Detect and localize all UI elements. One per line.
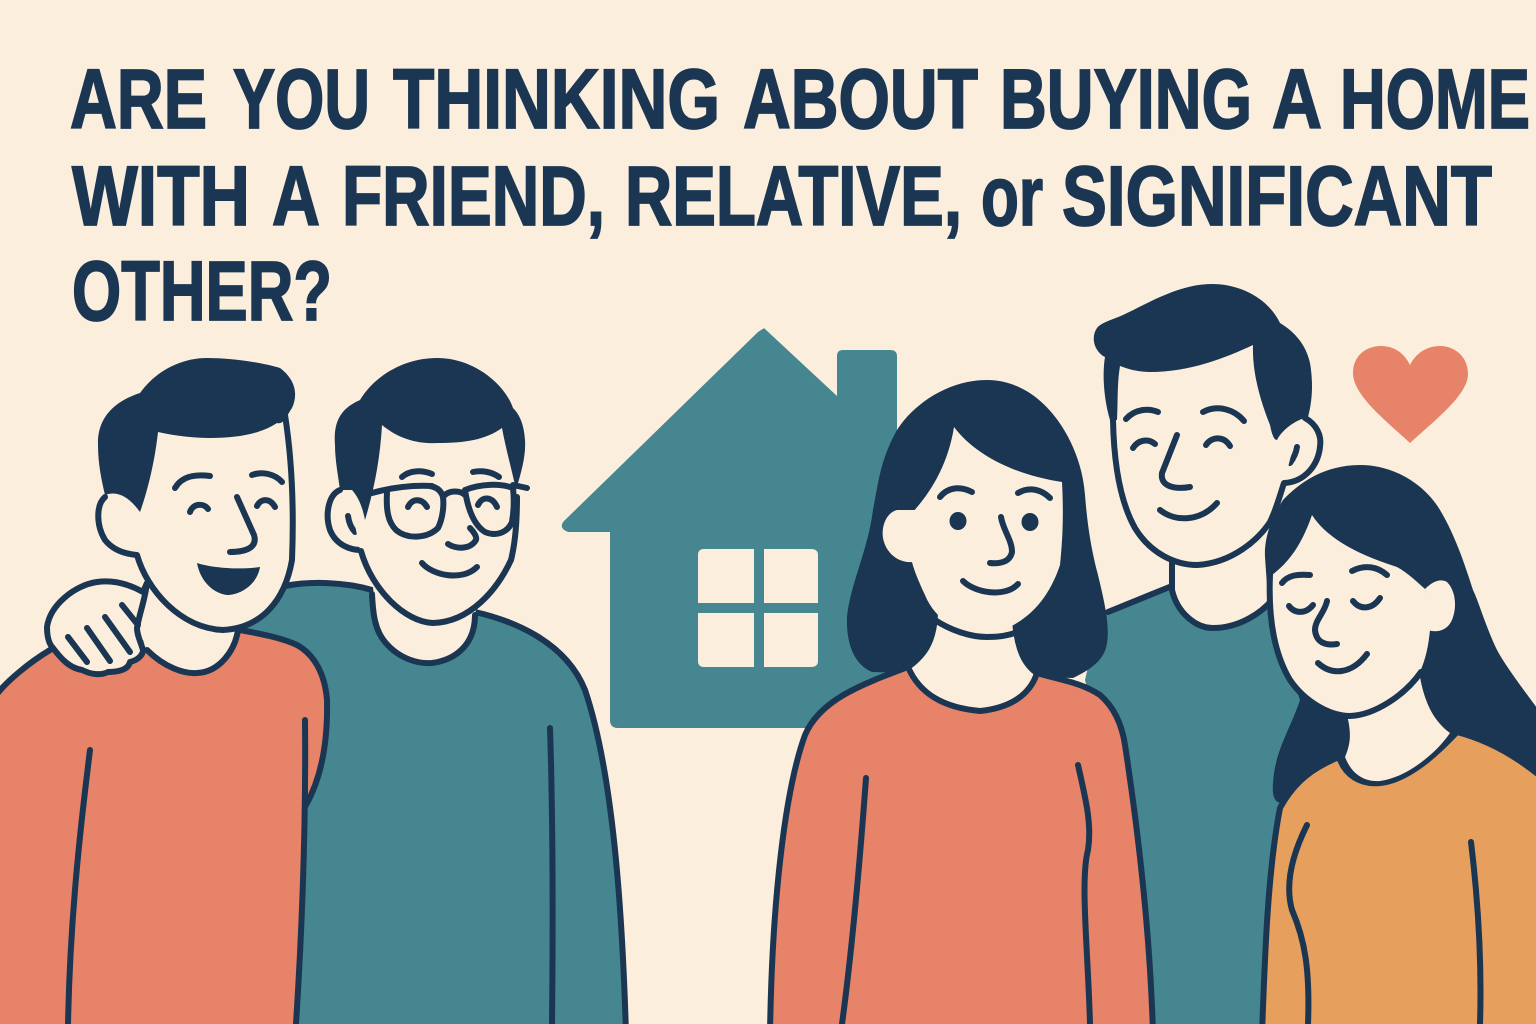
ear: [883, 510, 920, 562]
teal sweater: [240, 583, 626, 1024]
neck: [373, 585, 476, 663]
title: ABOUT: [743, 52, 978, 146]
hand on shoulder: [47, 581, 147, 674]
figure: man with glasses in teal sweater: [240, 358, 626, 1024]
brows: [402, 471, 432, 477]
neck: [1345, 677, 1450, 781]
mouth: [197, 563, 260, 595]
ear: [1425, 580, 1455, 631]
brows: [1126, 410, 1158, 419]
teal sweater: [1085, 587, 1360, 1024]
hair: [1094, 284, 1312, 440]
mouth: [422, 563, 477, 576]
nose: [448, 528, 476, 548]
figure: woman in orange sweater: [1262, 465, 1536, 1024]
title: FRIEND,: [342, 149, 605, 243]
face: [908, 427, 1063, 635]
figure: tall man in teal sweater: [1085, 284, 1360, 1024]
title: YOU: [233, 52, 370, 146]
nose: [1315, 601, 1337, 644]
brows: [1282, 575, 1310, 583]
nose: [990, 517, 1012, 563]
face: [135, 418, 292, 630]
mouth: [1160, 503, 1217, 518]
title: ARE: [70, 52, 207, 146]
hair: [847, 380, 1108, 678]
hair: [1265, 465, 1536, 803]
icon: heart: [1353, 346, 1468, 443]
title: RELATIVE,: [625, 149, 962, 243]
ear: [98, 497, 155, 555]
face: [1113, 340, 1295, 565]
ear: [328, 490, 375, 551]
face: [1270, 515, 1430, 715]
coral sweater: [0, 630, 327, 1024]
sweater: [770, 667, 1153, 1024]
title: A: [272, 149, 320, 243]
neck: [140, 585, 238, 673]
title: BUYING: [1000, 52, 1252, 146]
brows: [175, 475, 210, 488]
neck: [1172, 540, 1280, 628]
eyes: [408, 500, 427, 507]
title: A: [1272, 52, 1322, 146]
icon: window: [698, 549, 818, 667]
nose: [230, 497, 255, 552]
mouth: [963, 581, 1018, 592]
ear: [1270, 418, 1320, 483]
sweater: [1262, 732, 1536, 1024]
eyes: [1133, 441, 1155, 448]
neck and collar: [908, 610, 1037, 711]
figure: man in coral sweater: [0, 358, 327, 1024]
title: THINKING: [393, 52, 720, 146]
icon: house: [562, 328, 897, 740]
eyes: [950, 512, 966, 530]
eyes: [190, 505, 208, 512]
nose: [1162, 435, 1190, 488]
glasses: [372, 485, 527, 537]
title: WITH: [72, 149, 250, 243]
eyes: [1289, 605, 1313, 612]
hair: [335, 358, 525, 520]
title: OTHER?: [72, 244, 332, 338]
face: [350, 420, 516, 623]
figure: woman in coral sweater: [770, 380, 1153, 1024]
mouth: [1318, 654, 1367, 671]
brows: [940, 488, 972, 497]
hair: [98, 358, 295, 512]
title: [70, 52, 1530, 338]
title: or: [981, 149, 1043, 243]
